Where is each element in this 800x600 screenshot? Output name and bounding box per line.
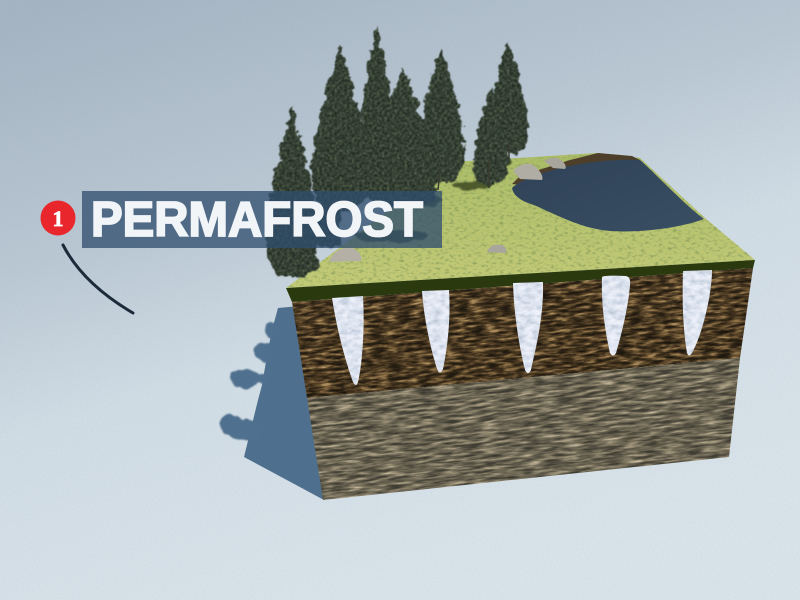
tree shadows on grass [356, 159, 512, 242]
boulder front [329, 248, 362, 262]
ice wedge 4 [602, 276, 630, 356]
number badge [40, 200, 76, 236]
pond bank [512, 153, 640, 186]
boulder pond left [513, 164, 542, 180]
tree 3 [359, 25, 395, 175]
tree 5 [417, 47, 465, 182]
ice wedge 2 [422, 290, 450, 372]
label text: PERMAFROST [91, 193, 423, 247]
tree 7 [488, 42, 528, 154]
conifer trees [266, 25, 528, 277]
permafrost block [286, 153, 755, 500]
boulder centre [487, 245, 506, 253]
number badge: 1 [52, 206, 64, 231]
tree 2 [311, 45, 369, 210]
rock layer [307, 358, 740, 500]
soil layer [292, 268, 753, 398]
label background [82, 191, 442, 248]
ice wedge 1 [332, 296, 364, 385]
ice wedge 3 [513, 282, 543, 373]
tree 1 [266, 105, 318, 277]
callout line [63, 245, 133, 313]
title label [82, 191, 442, 248]
grass top surface [286, 153, 755, 288]
cast shadow of block and trees [220, 306, 324, 500]
boulders [329, 158, 566, 262]
tree 6 [473, 85, 509, 185]
dark topsoil band [286, 260, 755, 302]
tree trunks [438, 140, 509, 190]
pond [512, 160, 704, 231]
undergrowth [280, 249, 320, 275]
boulder pond back [544, 158, 566, 169]
ice wedges [332, 270, 712, 385]
tree 4 [370, 68, 436, 208]
ice wedge 5 [683, 270, 712, 356]
